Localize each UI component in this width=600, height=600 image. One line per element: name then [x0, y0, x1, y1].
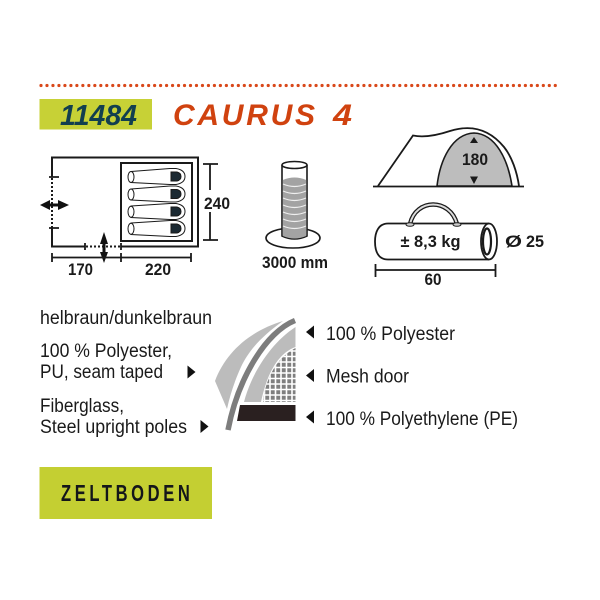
materials list left: Steel upright poles [40, 417, 187, 438]
pack bag with weight: ± 8,3 kg [400, 232, 460, 251]
floor plan diagram: 170 [68, 260, 93, 279]
dimensions: width [52, 253, 191, 262]
button: ZELTBODEN [40, 467, 212, 519]
pack bag with weight: 60 [424, 270, 442, 289]
materials list right [306, 324, 518, 430]
inner fabric [244, 327, 296, 402]
pole [228, 320, 295, 430]
pack bag with weight [375, 204, 544, 289]
button: ZELTBODEN: ZELTBODEN [61, 481, 190, 507]
pack bag with weight: 25 [526, 232, 544, 251]
badge: article number 11484: 11484 [60, 100, 137, 132]
arrow: side door [40, 200, 69, 210]
badge: article number 11484 [40, 99, 152, 132]
materials list left [40, 308, 212, 438]
arrow: front door [100, 232, 108, 263]
materials list right: 100 % Polyethylene (PE) [326, 409, 518, 430]
pack bag with weight: Ø [505, 232, 522, 251]
materials list left: 100 % Polyester, [40, 341, 172, 362]
arrow: down [470, 176, 478, 184]
materials list left: helbraun/dunkelbraun [40, 308, 212, 329]
icon: sleeping bags [128, 168, 185, 236]
materials list right: 100 % Polyester [326, 324, 456, 345]
title: CAURUS 4: 4 [332, 99, 352, 132]
materials list left: PU, seam taped [40, 362, 163, 383]
tent side view with height: 180 [462, 150, 488, 169]
title: CAURUS 4: CAURUS [173, 99, 315, 132]
dimension: depth [203, 164, 218, 240]
label: water column: 3000 mm [262, 253, 328, 272]
handle [410, 204, 457, 224]
tent material cross-section [215, 320, 297, 430]
floor [237, 405, 296, 421]
floor plan diagram: 240 [204, 194, 230, 213]
floor plan diagram: 220 [145, 260, 171, 279]
arrow [188, 366, 196, 378]
materials list left: Fiberglass, [40, 396, 124, 417]
outer fabric [215, 321, 283, 409]
mesh panel [263, 348, 296, 402]
materials list right: Mesh door [326, 366, 410, 388]
dimension: length [376, 264, 496, 277]
arrow: up [470, 137, 478, 143]
water column icon [262, 162, 328, 272]
tent side view with height [373, 128, 524, 186]
arrow [200, 420, 208, 433]
floor plan diagram [40, 158, 230, 279]
